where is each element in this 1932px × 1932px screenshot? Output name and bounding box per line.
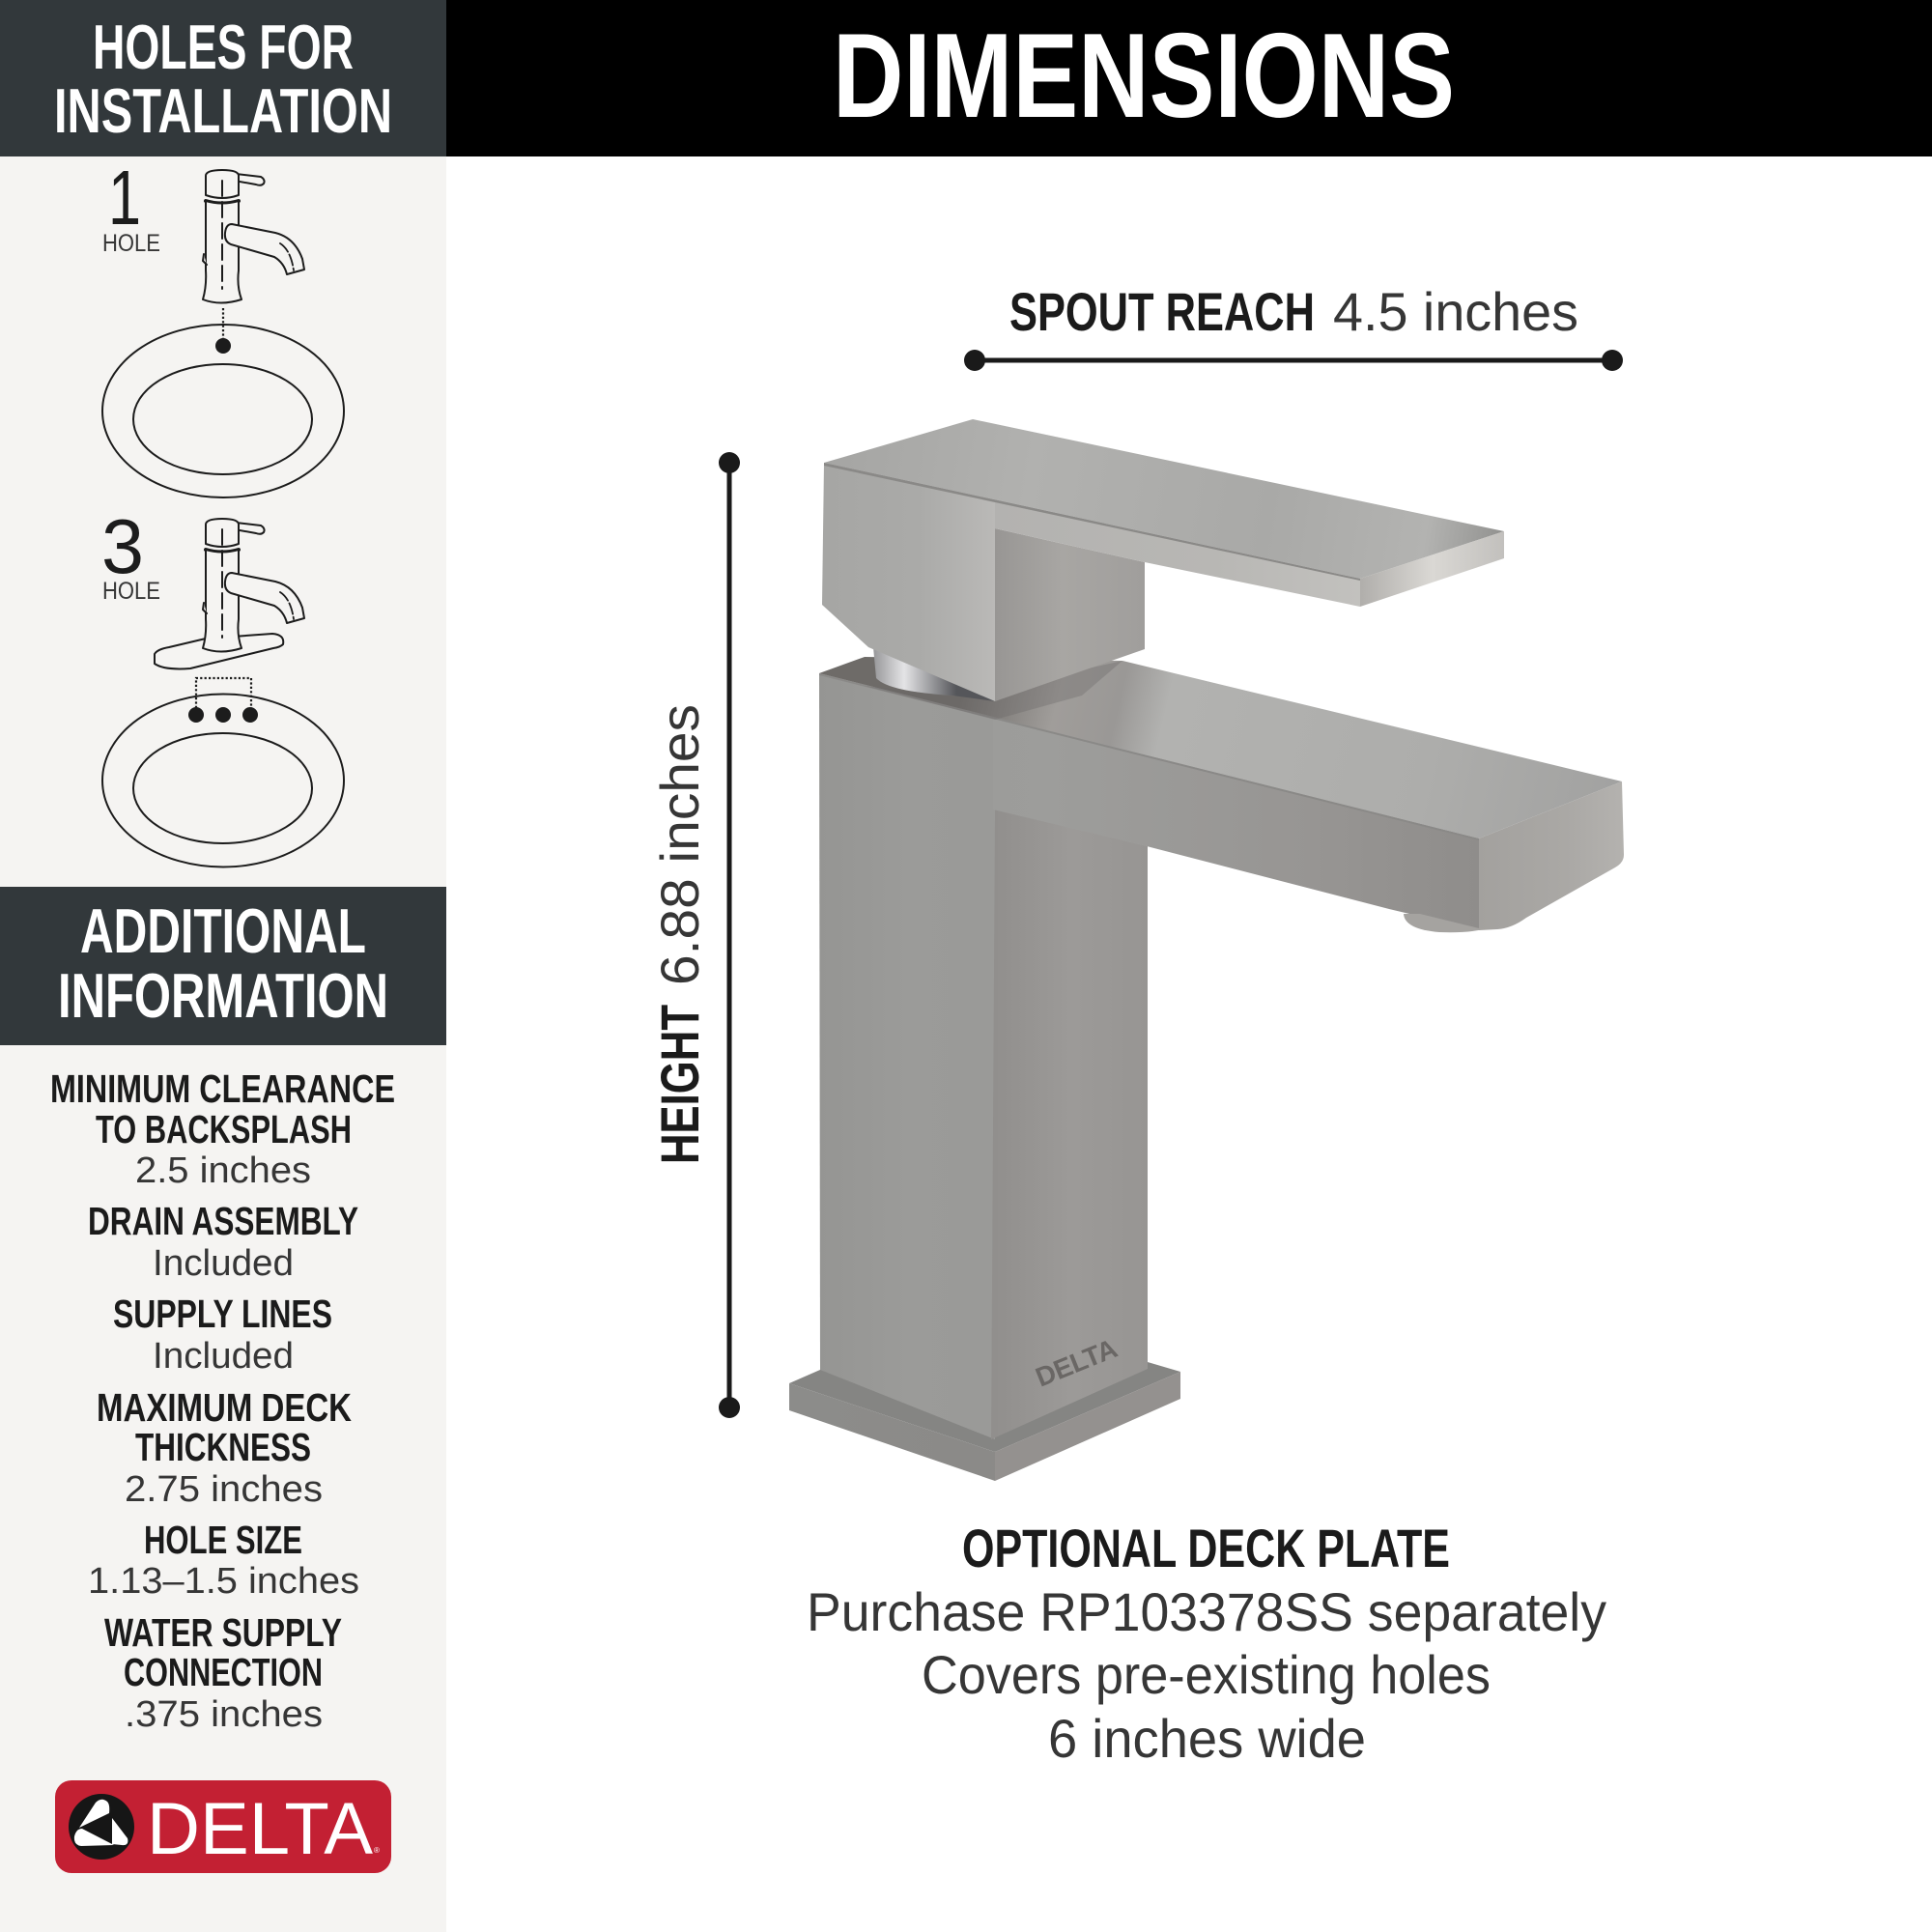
spec: hole size: 1.13–1.5 inches (88, 1561, 359, 1602)
icon: three hole faucet with deck plate (155, 519, 304, 668)
logo: Delta: ® (374, 1846, 380, 1855)
spec: supply lines (113, 1292, 332, 1377)
dimension: spout reach: SPOUT REACH (1009, 281, 1315, 342)
spec: water supply connection: WATER SUPPLY (104, 1610, 342, 1655)
heading: holes for installation: HOLES FOR (93, 12, 354, 82)
spec: hole size: HOLE SIZE (144, 1518, 302, 1562)
spec: maximum deck thickness: 2.75 inches (125, 1469, 323, 1510)
spec: maximum deck thickness: MAXIMUM DECK (97, 1385, 352, 1430)
heading: holes for installation: INSTALLATION (54, 75, 392, 146)
dimension: spout reach: 4.5 inches (1333, 281, 1578, 342)
spec: water supply connection: CONNECTION (124, 1650, 323, 1694)
spec: water supply connection (104, 1610, 342, 1735)
three hole label: 3 (101, 503, 144, 589)
logo: Delta (55, 1780, 391, 1873)
dimension: height: 6.88 inches (649, 704, 710, 985)
icon: single hole faucet line drawing (203, 170, 304, 303)
heading: holes for installation (0, 0, 446, 156)
one hole label: 1 (108, 155, 141, 241)
spec: maximum deck thickness: THICKNESS (135, 1425, 311, 1469)
faucet handle: DELTA (1032, 1333, 1122, 1393)
spec: supply lines: SUPPLY LINES (113, 1292, 332, 1336)
heading: additional information: INFORMATION (58, 960, 388, 1031)
callout: optional deck plate: Covers pre-existing holes (922, 1644, 1491, 1705)
spec: drain assembly: Included (153, 1243, 294, 1284)
dimension: height (649, 452, 740, 1418)
spec: minimum clearance (50, 1066, 395, 1191)
left sidebar panel (0, 0, 446, 1932)
callout: optional deck plate (807, 1518, 1606, 1769)
spec: hole size (88, 1518, 359, 1602)
heading: additional information: ADDITIONAL (80, 895, 366, 966)
icon: single hole sink (102, 308, 344, 497)
spec: drain assembly: DRAIN ASSEMBLY (88, 1199, 358, 1243)
spec: supply lines: Included (153, 1336, 294, 1377)
dimension: spout reach (964, 281, 1623, 371)
icon: three hole sink (102, 678, 344, 867)
spec: water supply connection: .375 inches (125, 1694, 323, 1735)
callout: optional deck plate: 6 inches wide (1048, 1708, 1366, 1769)
spec: minimum clearance: MINIMUM CLEARANCE (50, 1066, 395, 1111)
faucet body (819, 657, 1624, 1439)
one hole label: HOLE (102, 230, 160, 257)
spec: maximum deck thickness (97, 1385, 352, 1510)
heading: additional information (0, 887, 446, 1045)
dimension: height: HEIGHT (649, 1005, 710, 1164)
callout: optional deck plate: Purchase RP103378SS separately (807, 1581, 1606, 1642)
logo: Delta: DELTA (147, 1788, 373, 1870)
faucet base plate (789, 1362, 1180, 1481)
faucet handle (822, 419, 1504, 1393)
spec: drain assembly (88, 1199, 358, 1284)
spec: minimum clearance: TO BACKSPLASH (96, 1107, 352, 1151)
callout: optional deck plate: OPTIONAL DECK PLATE (962, 1518, 1450, 1578)
three hole label: HOLE (102, 578, 160, 605)
spec: minimum clearance: 2.5 inches (135, 1151, 311, 1191)
product: faucet (789, 419, 1624, 1481)
title banner: dimensions: DIMENSIONS (833, 10, 1455, 143)
one hole label (102, 155, 160, 257)
title banner: dimensions (446, 0, 1932, 156)
three hole label (101, 503, 160, 605)
